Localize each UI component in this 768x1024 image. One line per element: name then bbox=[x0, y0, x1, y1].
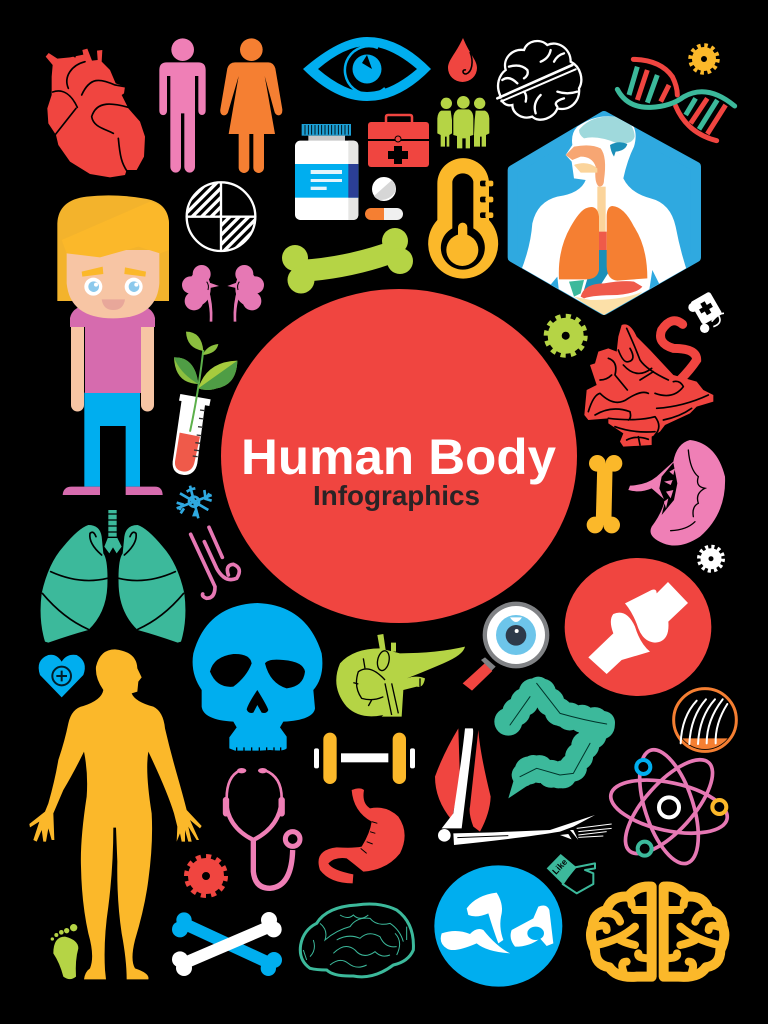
icon: green gear bbox=[546, 316, 585, 355]
icon: snowflake bbox=[177, 486, 212, 518]
icon: magnifying glass with eye bbox=[463, 602, 549, 691]
child legs and shoes bbox=[63, 393, 163, 495]
icon: hatched pie chart bbox=[187, 182, 255, 251]
icon: hair follicle circle bbox=[674, 689, 736, 751]
icon: blue heart with plus bbox=[39, 655, 85, 697]
icon: kidneys bbox=[182, 265, 264, 322]
icon: small intestine bbox=[584, 321, 713, 447]
icon: crossed bones bbox=[172, 912, 282, 976]
icon: thumbs up like bbox=[547, 854, 595, 893]
icon: child character bbox=[57, 195, 169, 495]
icon: yellow brain bbox=[591, 887, 724, 977]
icon: thumbs up like: Like bbox=[550, 857, 569, 876]
icon: joint circle bbox=[565, 558, 711, 696]
icon: lungs bbox=[41, 510, 185, 643]
icon: footprint bbox=[51, 924, 78, 979]
icon: anatomical heart bbox=[46, 49, 145, 177]
icon: skull bbox=[193, 603, 322, 751]
icon: stethoscope bbox=[226, 768, 300, 888]
icon: blue circle with foot bones bbox=[434, 865, 562, 987]
icon: red gear bbox=[186, 856, 226, 896]
icon: thermometer bbox=[428, 158, 498, 279]
icon: first aid kit bbox=[368, 115, 429, 167]
subtitle: Infographics bbox=[313, 480, 480, 511]
icon: people group bbox=[437, 96, 489, 148]
icon: spleen bbox=[628, 440, 725, 546]
icon: yellow bone bbox=[587, 455, 622, 533]
main title circle bbox=[221, 289, 577, 623]
icon: blood drop bbox=[448, 38, 477, 82]
right hemisphere bbox=[664, 887, 724, 977]
icon: pill bottle bbox=[295, 124, 358, 220]
icon: woman figure bbox=[220, 38, 282, 173]
icon: small first aid kit on wheels bbox=[688, 291, 724, 333]
icon: DNA helix bbox=[617, 59, 735, 141]
icon: white gear bbox=[699, 547, 723, 571]
icon: atom bbox=[606, 743, 732, 871]
icon: arm bones and muscle bbox=[435, 728, 612, 845]
panel: hexagon respiratory anatomy bbox=[513, 116, 696, 317]
left hemisphere bbox=[591, 887, 652, 977]
icon: white outline brain bbox=[497, 41, 581, 120]
icon: human body silhouette bbox=[29, 649, 202, 979]
title: Human Body bbox=[241, 429, 556, 485]
child shirt and arms bbox=[70, 305, 155, 412]
icon: wind bbox=[191, 527, 239, 598]
icon: large intestine bbox=[508, 683, 607, 798]
icon: man figure bbox=[159, 38, 206, 173]
icon: eye bbox=[303, 37, 431, 101]
child head bbox=[57, 195, 169, 318]
icon: pills bbox=[365, 177, 403, 220]
icon: dumbbell bbox=[314, 733, 415, 784]
icon: pancreas bbox=[336, 634, 465, 717]
icon: stomach bbox=[319, 788, 405, 883]
icon: teal outline brain bbox=[300, 904, 413, 977]
icon: green bone bbox=[282, 228, 413, 294]
icon: yellow gear bbox=[690, 46, 718, 72]
icon: plant in test tube bbox=[173, 332, 237, 475]
